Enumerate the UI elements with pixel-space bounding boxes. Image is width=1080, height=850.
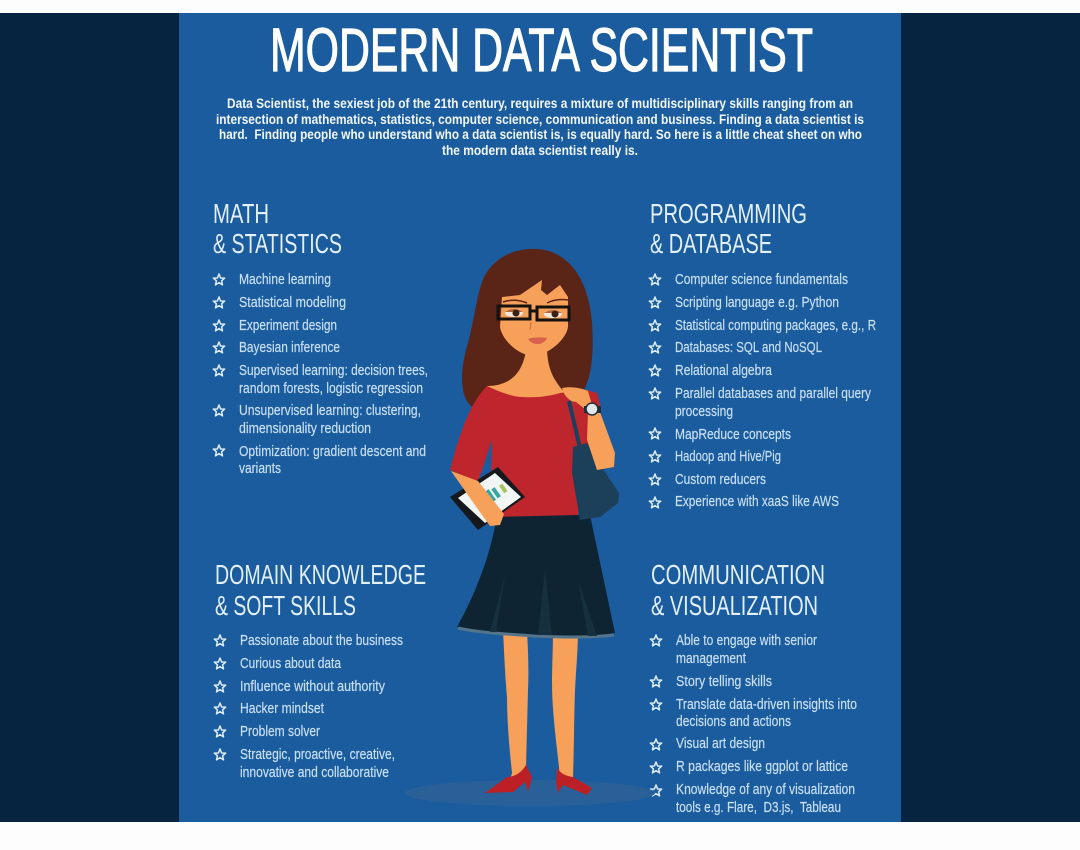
- skills list: communication: Knowledge of any of visualization: [676, 781, 855, 798]
- neck and chest: [487, 350, 564, 400]
- glasses: [498, 306, 569, 320]
- panel: blue poster: [179, 13, 901, 822]
- skills list: math: Unsupervised learning: clustering,: [239, 402, 421, 419]
- heading: math and statistics: MATH: [213, 198, 269, 229]
- panel: domain knowledge and soft skills: [214, 559, 426, 781]
- skills list: domain: [240, 632, 403, 781]
- skills list: programming: Hadoop and Hive/Pig: [675, 448, 781, 465]
- skills list: programming: [675, 271, 876, 510]
- skills list: communication: Visual art design: [676, 735, 765, 752]
- title: MODERN DATA SCIENTIST: [270, 16, 813, 84]
- skills list: domain: Curious about data: [240, 655, 342, 672]
- nose: [530, 322, 531, 330]
- skills list: math: [239, 271, 428, 477]
- skills list: programming: Relational algebra: [675, 362, 773, 379]
- panel: math and statistics: [213, 198, 428, 477]
- skills list: programming: Parallel databases and parallel query: [675, 385, 871, 402]
- skills list: math: random forests, logistic regression: [239, 380, 423, 397]
- wristwatch: [584, 403, 601, 415]
- skills list: programming: Statistical computing packages, e.g., R: [675, 317, 876, 334]
- heading: communication and visualization: [651, 559, 825, 621]
- skirt pleats: [490, 570, 597, 636]
- star bullets: math: [213, 274, 225, 456]
- intro paragraph: intersection of mathematics, statistics, computer science, communication and business. Finding a data scientist is: [216, 111, 864, 127]
- intro paragraph: the modern data scientist really is.: [442, 142, 638, 158]
- tablet chart: [480, 484, 508, 502]
- skills list: math: Statistical modeling: [239, 294, 346, 311]
- heading: programming and database: PROGRAMMING: [650, 198, 807, 229]
- head: [500, 280, 568, 356]
- skills list: math: dimensionality reduction: [239, 420, 371, 437]
- skills list: programming: Custom reducers: [675, 471, 766, 488]
- heading: programming and database: & DATABASE: [650, 228, 772, 259]
- skills list: math: Bayesian inference: [239, 339, 340, 356]
- heading: domain knowledge and soft skills: DOMAIN KNOWLEDGE: [215, 559, 426, 590]
- star bullets: domain: [214, 635, 226, 760]
- skills list: math: Machine learning: [239, 271, 331, 288]
- skills list: communication: Translate data-driven insights into: [676, 696, 857, 713]
- skills list: math: variants: [239, 460, 281, 477]
- skills list: programming: processing: [675, 403, 733, 420]
- tablet: [450, 467, 525, 530]
- heading: communication and visualization: & VISUALIZATION: [651, 590, 818, 621]
- skirt hem: [458, 628, 614, 637]
- hair: [462, 249, 593, 407]
- red shoes: [485, 765, 592, 795]
- legs: [503, 630, 578, 780]
- panel: programming and database: [649, 198, 876, 510]
- skills list: programming: Computer science fundamentals: [675, 271, 848, 288]
- star bullets: programming: [649, 274, 661, 508]
- skills list: domain: Hacker mindset: [240, 700, 325, 717]
- heading: communication and visualization: COMMUNICATION: [651, 559, 825, 590]
- right forearm and hand: [562, 387, 615, 470]
- skills list: domain: Influence without authority: [240, 678, 385, 695]
- skills list: communication: [676, 632, 857, 816]
- skills list: domain: Problem solver: [240, 723, 320, 740]
- red top: [450, 386, 601, 517]
- eyebrows: [503, 300, 568, 303]
- bag strap: [569, 401, 580, 448]
- heading: math and statistics: & STATISTICS: [213, 228, 342, 259]
- intro paragraph: [216, 95, 864, 158]
- skills list: communication: management: [676, 650, 747, 667]
- shoulder bag: [572, 443, 619, 520]
- skills list: communication: R packages like ggplot or lattice: [676, 758, 848, 775]
- skills list: math: Experiment design: [239, 317, 337, 334]
- heading: domain knowledge and soft skills: [215, 559, 426, 621]
- panel: communication and visualization: [650, 559, 857, 816]
- star bullets: communication: [650, 635, 662, 796]
- skills list: domain: innovative and collaborative: [240, 764, 389, 781]
- heading: math and statistics: [213, 198, 342, 259]
- skirt: [457, 515, 615, 636]
- skills list: math: Supervised learning: decision trees,: [239, 362, 428, 379]
- skills list: communication: tools e.g. Flare, D3.js, Tableau: [676, 799, 841, 816]
- eyes: [505, 309, 562, 318]
- skills list: communication: Able to engage with senior: [676, 632, 817, 649]
- heading: domain knowledge and soft skills: & SOFT SKILLS: [215, 590, 356, 621]
- left forearm and hand: [451, 471, 504, 526]
- skills list: math: Optimization: gradient descent and: [239, 443, 426, 460]
- intro paragraph: hard. Finding people who understand who a data scientist is, is equally hard. So here is a little cheat sheet on who: [219, 126, 862, 142]
- skills list: programming: Databases: SQL and NoSQL: [675, 339, 822, 356]
- illustration: woman data scientist: [405, 249, 655, 806]
- heading: programming and database: [650, 198, 807, 259]
- skills list: communication: decisions and actions: [676, 713, 791, 730]
- lips: [528, 337, 547, 344]
- skills list: domain: Strategic, proactive, creative,: [240, 746, 395, 763]
- skills list: communication: Story telling skills: [676, 673, 772, 690]
- skills list: programming: Scripting language e.g. Python: [675, 294, 839, 311]
- intro paragraph: Data Scientist, the sexiest job of the 21th century, requires a mixture of multidisciplinary skills ranging from an: [227, 95, 853, 111]
- skills list: programming: MapReduce concepts: [675, 426, 791, 443]
- skills list: programming: Experience with xaaS like AWS: [675, 493, 839, 510]
- floor shadow: [405, 780, 655, 806]
- skills list: domain: Passionate about the business: [240, 632, 403, 649]
